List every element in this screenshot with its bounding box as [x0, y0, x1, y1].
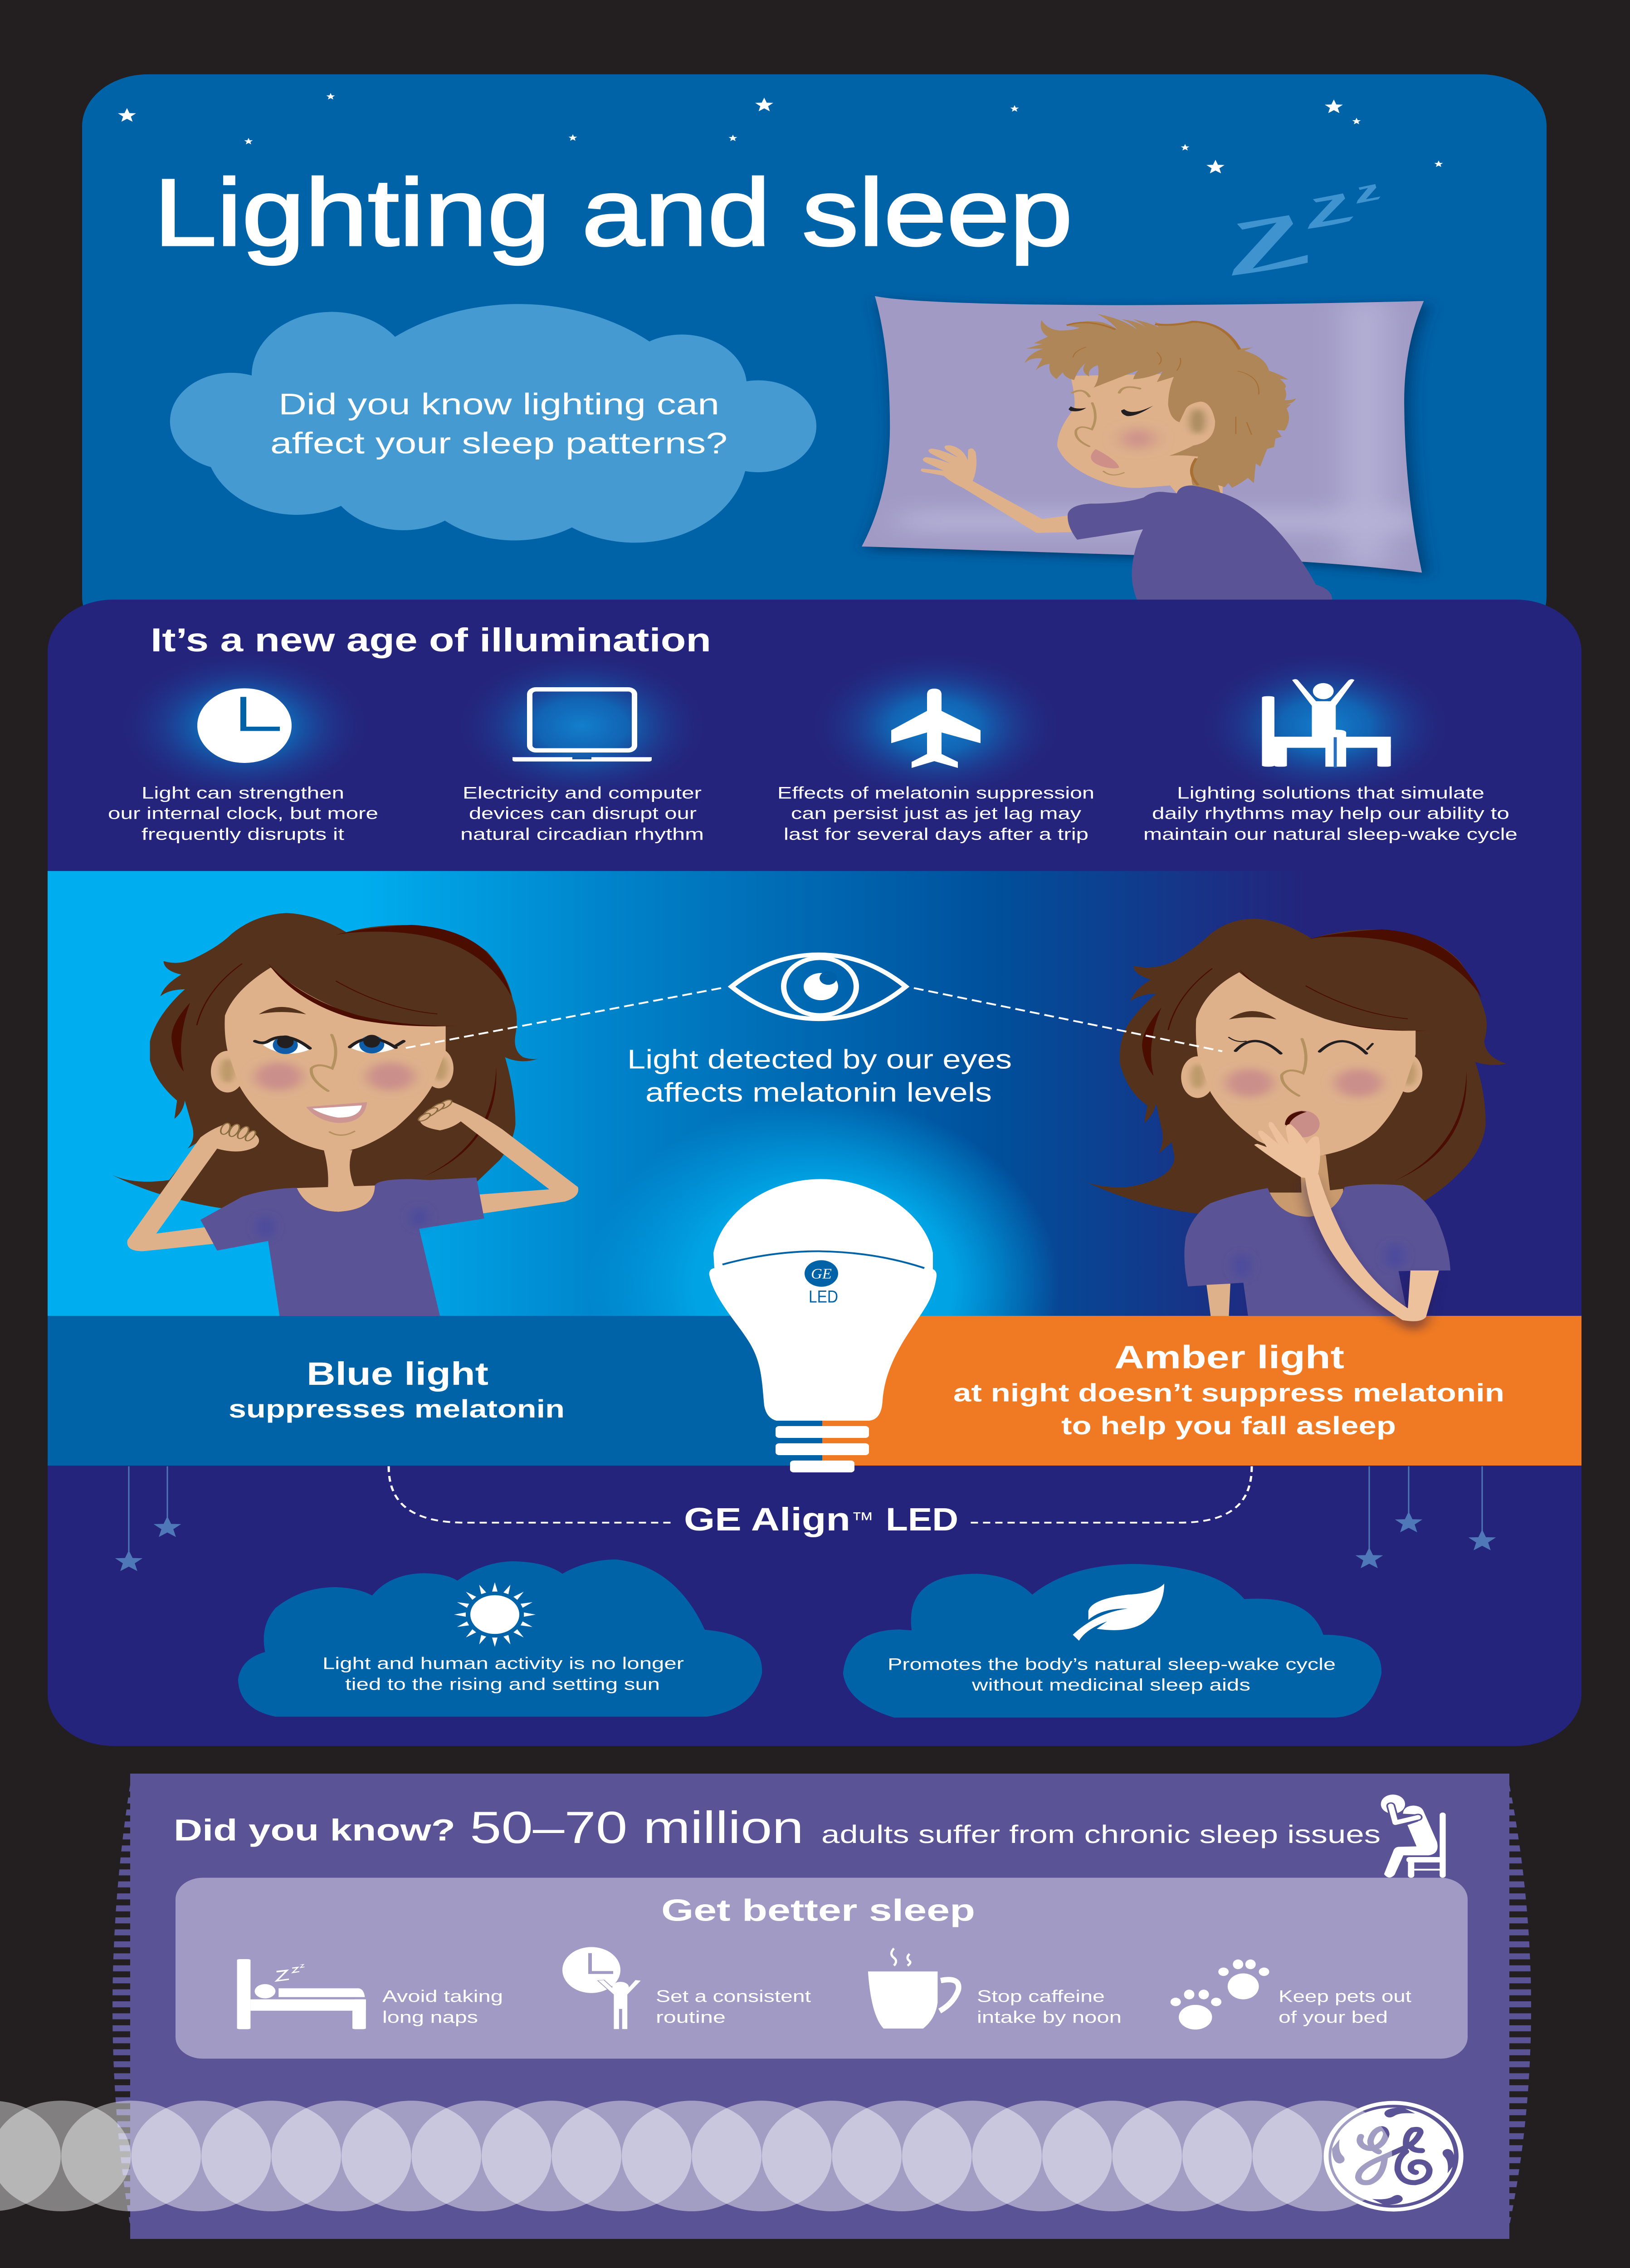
icon: snoring z letters: [1232, 184, 1381, 275]
tip text: [977, 1987, 1122, 2026]
icon: leaf: [1073, 1584, 1164, 1641]
text: amber light: [953, 1339, 1504, 1440]
icon: person stretching in bed: [1262, 679, 1391, 767]
icon: sun: [454, 1582, 536, 1647]
face: [1196, 972, 1415, 1157]
ears: [211, 1051, 244, 1093]
dashed connector: [389, 1466, 1252, 1523]
mouth: [306, 1102, 367, 1123]
callout text: [270, 387, 727, 460]
hair: [1025, 314, 1296, 494]
icon: coffee cup: [868, 1948, 959, 2028]
icon: clock: [197, 688, 292, 763]
caption: sleep-wake: maintain our natural sleep-wake cycle: [1143, 825, 1518, 843]
leaf cloud text: [888, 1655, 1336, 1694]
ear shading: [1190, 408, 1205, 434]
tip text: Stop caffeine: [977, 1987, 1105, 2005]
small GE badge: [805, 1260, 838, 1287]
heading: get better sleep: Get better sleep: [661, 1894, 975, 1928]
left arm and fist: [127, 1123, 259, 1251]
tip text: [656, 1987, 811, 2026]
caption: jet lag: Effects of melatonin suppression: [777, 783, 1094, 802]
heading: GE Align LED: GE Align: [684, 1502, 850, 1538]
bulb base: [776, 1426, 869, 1472]
tip text: Avoid taking: [382, 1987, 503, 2005]
bulb seam: [722, 1251, 924, 1268]
icon: paw prints: [1171, 1960, 1269, 2029]
tip text: routine: [656, 2008, 726, 2026]
panel: night sky header: [82, 74, 1547, 649]
LED label: LED: [809, 1287, 838, 1306]
text: light detected: Light detected by our eyes: [627, 1045, 1012, 1075]
left arm: [1206, 1284, 1230, 1316]
arm shadow: [1302, 1179, 1436, 1330]
shirt: [1184, 1184, 1450, 1316]
fringe shadow: [268, 963, 458, 1026]
tip: caffeine: [868, 1948, 1122, 2028]
title: Lighting and sleep: [154, 159, 1073, 265]
caption: electricity: devices can disrupt our: [469, 804, 697, 822]
hand over mouth: [1254, 1122, 1320, 1179]
tip text: of your bed: [1279, 2008, 1388, 2026]
tip text: Set a consistent: [656, 1987, 811, 2005]
sun cloud text: [322, 1654, 684, 1694]
caption: electricity: Electricity and computer: [463, 783, 702, 802]
cloud: sun: [238, 1559, 762, 1716]
stat line: 50–70 million: [470, 1802, 804, 1853]
caption: sleep-wake: [1143, 783, 1518, 843]
callout text: Did you know lighting can: [278, 387, 719, 420]
shirt: [1068, 485, 1332, 605]
brow: [1229, 1011, 1277, 1019]
sun cloud text: Light and human activity is no longer: [322, 1654, 684, 1673]
heading: new age of illumination: It’s a new age of illumination: [151, 621, 711, 659]
caption: clock: frequently disrupts it: [142, 825, 344, 843]
mouth: [1091, 449, 1119, 469]
brow: [259, 1007, 306, 1014]
yawning mouth: [1285, 1110, 1320, 1138]
icon glows: [115, 649, 1454, 803]
heading: GE Align LED: LED: [886, 1502, 958, 1538]
shirt: [200, 1178, 484, 1316]
hair: [1079, 919, 1507, 1214]
hair shadows: [1142, 929, 1482, 1181]
closed eyelids: [1069, 406, 1153, 416]
illustration: awake woman: [108, 913, 578, 1316]
text: blue light: suppresses melatonin: [229, 1395, 565, 1423]
stars: [118, 93, 1443, 173]
panel: get better sleep: [176, 1878, 1468, 2059]
icon: eye: [732, 955, 906, 1019]
caption: clock: our internal clock, but more: [108, 804, 378, 822]
face: [224, 968, 446, 1152]
tip: pets: [1171, 1960, 1411, 2029]
icon: person on chair: [1381, 1794, 1446, 1878]
icon: airplane: [891, 689, 981, 768]
captions row: [108, 783, 1518, 843]
pillow shadow: [865, 299, 1428, 576]
dashed sight lines: [404, 988, 1222, 1051]
caption: electricity: natural circadian rhythm: [460, 825, 704, 843]
stat line: [174, 1802, 1381, 1853]
hanging stars right: [1356, 1466, 1496, 1568]
icon: laptop: [512, 689, 652, 762]
callout cloud: [170, 304, 816, 543]
text: amber light: Amber light: [1114, 1339, 1344, 1375]
illustration: yawning woman: [1079, 919, 1507, 1330]
leaf cloud text: Promotes the body’s natural sleep-wake cycle: [888, 1655, 1336, 1673]
logo: GE monogram: [1306, 2090, 1479, 2222]
pillow: [854, 291, 1441, 580]
illustration: sleeping boy on pillow: [854, 291, 1441, 605]
icon: bed: [237, 1959, 366, 2029]
heading: GE Align LED: [684, 1502, 958, 1538]
hair strands: [1067, 322, 1259, 485]
caption: electricity: [460, 783, 704, 843]
caption: sleep-wake: Lighting solutions that simulate: [1177, 783, 1484, 802]
caption: jet lag: last for several days after a trip: [784, 825, 1088, 843]
cloud: leaf: [843, 1564, 1381, 1717]
hair: [108, 913, 538, 1214]
caption: sleep-wake: daily rhythms may help our ability to: [1152, 804, 1509, 822]
tip text: Keep pets out: [1279, 1987, 1411, 2005]
overlapping bubble row: [0, 2101, 1392, 2211]
blush: [1122, 429, 1154, 449]
stat line: Did you know?: [174, 1813, 455, 1847]
sun cloud text: tied to the rising and setting sun: [345, 1675, 660, 1694]
small GE badge: GE: [811, 1266, 832, 1282]
tip text: [1279, 1987, 1411, 2026]
panel: navy main card: [48, 600, 1581, 1746]
tip text: [382, 1987, 503, 2026]
icon: clock and person: [562, 1947, 641, 2029]
raised arm: [1305, 1174, 1439, 1321]
right arm and fist: [416, 1099, 578, 1213]
nose: [1282, 1039, 1306, 1096]
caption: jet lag: can persist just as jet lag may: [791, 804, 1082, 822]
ears: [1181, 1056, 1214, 1098]
tip: routine: [562, 1947, 811, 2029]
icon: LED bulb: [709, 1179, 937, 1472]
caption: clock: [108, 783, 378, 843]
tip: naps: [237, 1959, 503, 2029]
blush: [254, 1062, 303, 1090]
neck: [1268, 1155, 1343, 1217]
bar: amber light: [822, 1316, 1581, 1466]
callout text: affect your sleep patterns?: [270, 426, 727, 460]
arm and hand: [921, 445, 1072, 533]
text: light detected: affects melatonin levels: [645, 1078, 992, 1108]
nose: [311, 1035, 336, 1091]
bulb glow: [585, 1099, 1061, 1316]
gradient band: [48, 871, 1581, 1316]
heading: GE Align LED: ™: [851, 1508, 874, 1531]
blush: [1226, 1069, 1274, 1097]
tip text: long naps: [382, 2008, 478, 2026]
stat line: adults suffer from chronic sleep issues: [821, 1821, 1381, 1848]
panel: purple tips card: [112, 1774, 1531, 2239]
eyes: [255, 1035, 404, 1054]
leaf cloud text: without medicinal sleep aids: [971, 1676, 1250, 1694]
tip text: intake by noon: [977, 2008, 1122, 2026]
text: blue light: Blue light: [307, 1356, 488, 1392]
caption: jet lag: [777, 783, 1094, 843]
hanging stars left: [115, 1466, 181, 1571]
bar: blue light: [48, 1316, 822, 1466]
hair shadows: [171, 925, 511, 1177]
text: light detected: [627, 1045, 1012, 1108]
closed eyes: [1229, 1037, 1372, 1053]
neck: [297, 1150, 375, 1212]
facial features: [1072, 387, 1140, 475]
caption: clock: Light can strengthen: [142, 783, 344, 802]
text: amber light: at night doesn’t suppress melatonin: [953, 1379, 1504, 1407]
text: blue light: [229, 1356, 565, 1423]
text: amber light: to help you fall asleep: [1061, 1412, 1396, 1440]
face: [1057, 374, 1223, 495]
